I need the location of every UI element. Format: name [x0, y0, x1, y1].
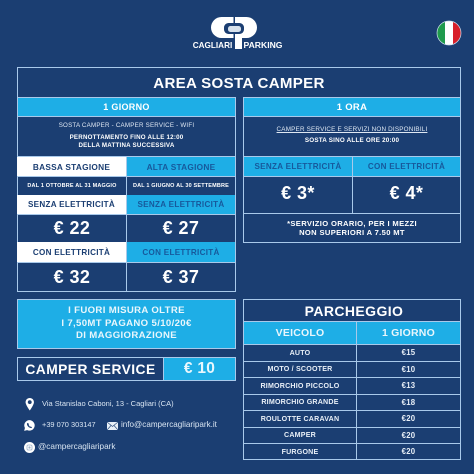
callout: fuori misura: DI MAGGIORAZIONE [76, 330, 177, 341]
note: servizio orario: *SERVIZIO ORARIO, PER I MEZZI [287, 218, 417, 228]
row: furgone: €20 [402, 447, 415, 456]
row: moto scooter: €10 [402, 365, 415, 374]
icon: instagram [24, 442, 35, 453]
header: veicolo: VEICOLO [276, 327, 324, 339]
price: 3 euro [244, 177, 352, 213]
label: con elettricita: CON ELETTRICITÀ [368, 162, 445, 171]
header: 1 giorno: 1 GIORNO [103, 102, 150, 112]
text: date alta stagione [127, 177, 235, 195]
price: 22 euro [18, 215, 126, 242]
header: 1 giorno: 1 GIORNO [382, 327, 435, 339]
icon: email [107, 422, 118, 430]
icon: italian flag [436, 20, 462, 46]
label: senza elettricita alta: SENZA ELETTRICITÀ [137, 200, 225, 209]
heading: area sosta camper [17, 67, 461, 98]
text: servizi inclusi [18, 117, 235, 156]
text: servizi inclusi: PERNOTTAMENTO FINO ALLE 12:00 [70, 134, 183, 141]
row: camper: CAMPER [284, 431, 316, 439]
header: veicolo [244, 322, 356, 344]
label: senza elettricita: SENZA ELETTRICITÀ [254, 162, 342, 171]
row: rimorchio piccolo [244, 378, 460, 394]
text: condizioni: CAMPER SERVICE E SERVIZI NON DISPONIBILI [277, 126, 427, 133]
text: address: Via Stanislao Caboni, 13 - Cagliari (CA) [42, 399, 174, 408]
callout: fuori misura: I FUORI MISURA OLTRE [68, 305, 185, 316]
icon: location pin [26, 398, 34, 410]
label: con elettricita bassa: CON ELETTRICITÀ [33, 248, 110, 256]
panel: parcheggio [243, 299, 461, 460]
price: 4 euro [353, 177, 460, 213]
header: 1 ora [244, 98, 460, 116]
note: servizio orario [244, 214, 460, 242]
row: moto scooter: MOTO / SCOOTER [268, 365, 332, 373]
label: senza elettricita bassa: SENZA ELETTRICITÀ [28, 200, 115, 209]
logo [193, 17, 282, 50]
price: 10 euro: € 10 [184, 360, 215, 377]
price: 37 euro [127, 263, 235, 291]
row: rimorchio grande: €18 [402, 398, 415, 407]
price: 3 euro: € 3* [281, 182, 315, 202]
heading: area sosta camper: AREA SOSTA CAMPER [153, 74, 325, 92]
label: con elettricita alta [127, 242, 235, 262]
text: phone: +39 070 303147 [42, 420, 96, 429]
row: rimorchio grande [244, 395, 460, 410]
text: date bassa stagione [18, 177, 126, 195]
row: auto [244, 345, 460, 361]
panel: 1 ora [243, 97, 461, 243]
panel: camper service [17, 357, 236, 381]
label: senza elettricita bassa [17, 195, 126, 214]
price: 27 euro [127, 215, 235, 242]
label: camper service [18, 358, 163, 380]
text: date alta stagione: DAL 1 GIUGNO AL 30 SETTEMBRE [133, 183, 229, 189]
row: rimorchio piccolo: €13 [402, 381, 415, 390]
label: con elettricita [353, 157, 460, 176]
price: 4 euro: € 4* [390, 182, 423, 202]
header: alta stagione: ALTA STAGIONE [147, 162, 215, 172]
row: furgone [244, 444, 460, 459]
row: moto scooter [244, 362, 460, 377]
text: date bassa stagione: DAL 1 OTTOBRE AL 31 MAGGIO [27, 183, 117, 189]
header: 1 giorno [18, 98, 235, 116]
text: servizi inclusi: SOSTA CAMPER - CAMPER SERVICE - WIFI [59, 122, 194, 129]
price: 27 euro: € 27 [163, 218, 199, 238]
header: bassa stagione [17, 157, 126, 176]
label: senza elettricita alta [127, 195, 235, 214]
row: furgone: FURGONE [282, 448, 318, 456]
row: roulotte caravan: ROULOTTE CARAVAN [261, 415, 339, 423]
panel: area sosta camper [17, 67, 461, 292]
label: camper service: CAMPER SERVICE [25, 362, 156, 376]
logo: CAGLIARI [193, 40, 232, 50]
header: alta stagione [127, 157, 235, 176]
text: email: info@campercagliaripark.it [121, 420, 217, 429]
text: servizi inclusi: DELLA MATTINA SUCCESSIVA [78, 142, 175, 149]
label: con elettricita alta: CON ELETTRICITÀ [142, 248, 220, 256]
heading: parcheggio [244, 300, 460, 321]
text: condizioni: SOSTA SINO ALLE ORE 20:00 [305, 137, 399, 144]
row: camper [244, 428, 460, 443]
text: condizioni [244, 117, 460, 156]
price: 32 euro: € 32 [54, 266, 90, 286]
row: auto: AUTO [290, 349, 310, 357]
price: 22 euro: € 22 [54, 218, 90, 238]
row: roulotte caravan: €20 [402, 414, 415, 423]
row: auto: €15 [402, 348, 415, 357]
row: rimorchio grande: RIMORCHIO GRANDE [261, 398, 339, 406]
callout: fuori misura: I 7,50MT PAGANO 5/10/20€ [61, 318, 192, 329]
heading: parcheggio: PARCHEGGIO [305, 302, 403, 318]
row: camper: €20 [402, 431, 415, 440]
note: servizio orario: NON SUPERIORI A 7.50 MT [299, 228, 405, 237]
panel: 1 giorno [17, 97, 236, 292]
header: bassa stagione: BASSA STAGIONE [33, 162, 110, 172]
price: 32 euro [18, 263, 126, 291]
price: 37 euro: € 37 [163, 266, 199, 286]
icon: whatsapp [24, 420, 35, 431]
logo: PARKING [244, 40, 282, 50]
label: senza elettricita [244, 157, 352, 176]
row: rimorchio piccolo: RIMORCHIO PICCOLO [260, 382, 340, 390]
label: con elettricita bassa [17, 242, 126, 262]
header: 1 giorno [357, 322, 460, 344]
callout: fuori misura [17, 299, 236, 349]
price: 10 euro [164, 358, 235, 380]
row: roulotte caravan [244, 411, 460, 427]
header: 1 ora: 1 ORA [337, 102, 367, 112]
text: instagram: @campercagliaripark [38, 442, 115, 451]
